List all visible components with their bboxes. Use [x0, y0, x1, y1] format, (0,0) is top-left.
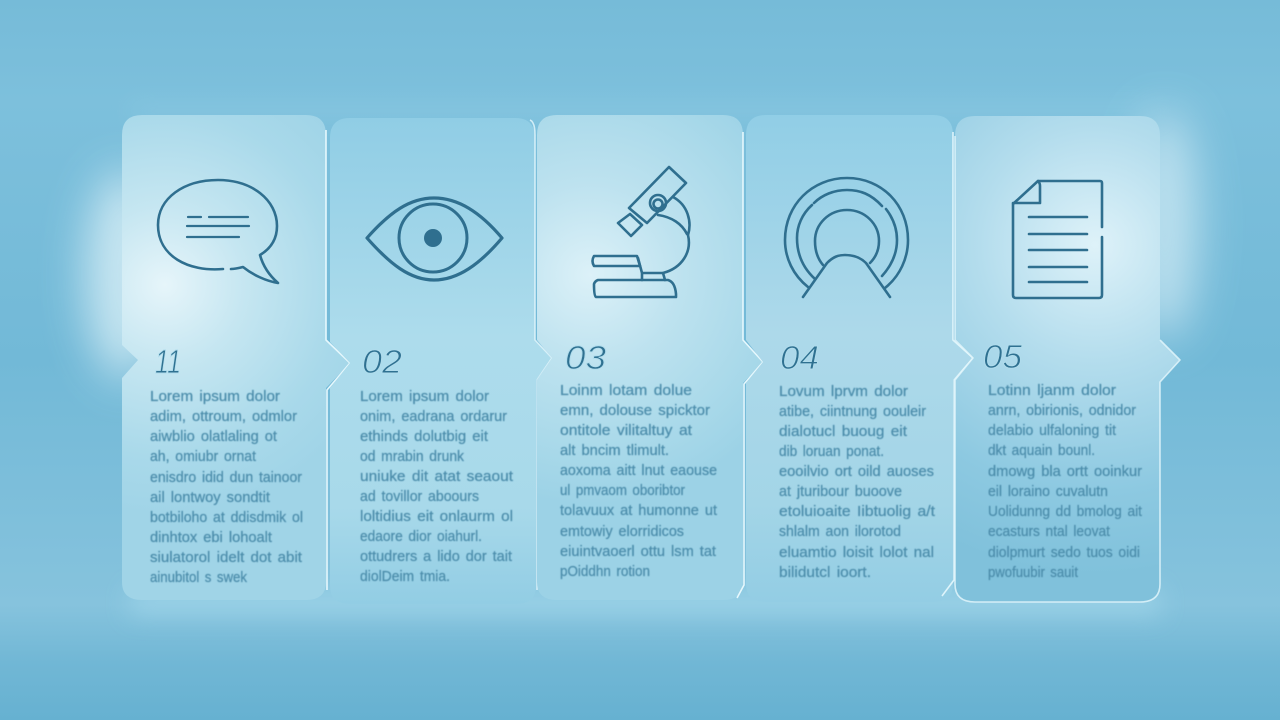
text block 2: ethinds dolutbig eit: [360, 428, 489, 445]
text block 4: at jturibour buoove: [779, 483, 902, 500]
text block 1: siulatorol idelt dot abit: [150, 549, 303, 566]
number 3: 03: [565, 339, 607, 376]
text block 4: bilidutcl ioort.: [779, 564, 871, 581]
panel: step 5: [955, 116, 1180, 602]
text block 3: ontitole vilitaltuy at: [560, 422, 693, 439]
text block 3: emn, dolouse spicktor: [560, 402, 710, 419]
text block 2: diolDeim tmia.: [360, 568, 450, 585]
number 2: 02: [362, 343, 402, 380]
icon: document: [1013, 181, 1102, 298]
text block 2: Lorem ipsum dolor: [360, 388, 489, 405]
text block 4: eooilvio ort oild auoses: [779, 463, 934, 480]
number 5: 05: [983, 338, 1023, 375]
text block 2: onim, eadrana ordarur: [360, 408, 507, 425]
text block 3: eiuintvaoerl ottu lsm tat: [560, 543, 717, 560]
text block 3: Loinm lotam dolue: [560, 382, 692, 399]
text block 2: ad tovillor aboours: [360, 488, 479, 505]
text block 5: eil loraino cuvalutn: [988, 483, 1108, 500]
text block 5: [988, 382, 1143, 581]
text block 5: anrn, obirionis, odnidor: [988, 402, 1136, 419]
text block 3: ul pmvaom oboribtor: [560, 482, 685, 499]
text block 5: dmowg bla ortt ooinkur: [988, 463, 1142, 480]
panel: step 2: [330, 118, 552, 604]
text block 1: botbiloho at ddisdmik ol: [150, 509, 303, 526]
text block 3: alt bncim tlimult.: [560, 442, 669, 459]
text block 4: [779, 383, 936, 581]
text block 1: aiwblio olatlaling ot: [150, 428, 278, 445]
icon: speech bubble: [158, 180, 278, 283]
text block 3: emtowiy elorridicos: [560, 523, 684, 540]
text block 5: Uolidunng dd bmolog ait: [988, 503, 1143, 520]
text block 4: eluamtio loisit lolot nal: [779, 544, 934, 561]
text block 1: Lorem ipsum dolor: [150, 388, 280, 405]
text block 5: dkt aquain bounl.: [988, 442, 1095, 459]
text block 2: [360, 388, 514, 585]
text block 4: Lovum lprvm dolor: [779, 383, 908, 400]
panel: step 1: [122, 115, 350, 600]
text block 3: tolavuux at humonne ut: [560, 502, 718, 519]
text block 4: dialotucl buoug eit: [779, 423, 908, 440]
text block 3: [560, 382, 718, 580]
text block 2: uniuke dit atat seaout: [360, 468, 514, 485]
text block 4: atibe, ciintnung oouleir: [779, 403, 926, 420]
text block 3: pOiddhn rotion: [560, 563, 650, 580]
text block 2: edaore dior oiahurl.: [360, 528, 482, 545]
text block 3: aoxoma aitt lnut eaouse: [560, 462, 717, 479]
text block 4: shlalm aon ilorotod: [779, 523, 901, 540]
text block 2: ottudrers a lido dor tait: [360, 548, 513, 565]
text block 1: [150, 388, 303, 586]
panel: step 3: [537, 115, 763, 600]
text block 1: ah, omiubr ornat: [150, 448, 257, 465]
text block 5: Lotinn ljanm dolor: [988, 382, 1116, 399]
text block 4: dib loruan ponat.: [779, 443, 884, 460]
icon: arch: [785, 178, 908, 297]
text block 2: loltidius eit onlaurm ol: [360, 508, 513, 525]
text block 5: delabio ulfaloning tit: [988, 422, 1117, 439]
icon: eye: [367, 198, 502, 280]
text block 2: od mrabin drunk: [360, 448, 464, 465]
text block 5: diolpmurt sedo tuos oidi: [988, 544, 1140, 561]
text block 5: pwofuubir sauit: [988, 564, 1079, 581]
panel: step 4: [746, 115, 973, 602]
text block 1: ainubitol s swek: [150, 569, 247, 586]
text block 1: adim, ottroum, odmlor: [150, 408, 297, 425]
text block 1: ail lontwoy sondtit: [150, 489, 271, 506]
number 1: 11: [155, 343, 181, 380]
text block 1: dinhtox ebi lohoalt: [150, 529, 273, 546]
number 4: 04: [780, 339, 819, 376]
text block 1: enisdro idid dun tainoor: [150, 469, 302, 486]
text block 4: etoluioaite Iibtuolig a/t: [779, 503, 936, 520]
text block 5: ecasturs ntal leovat: [988, 523, 1111, 540]
icon: microscope: [592, 167, 689, 297]
